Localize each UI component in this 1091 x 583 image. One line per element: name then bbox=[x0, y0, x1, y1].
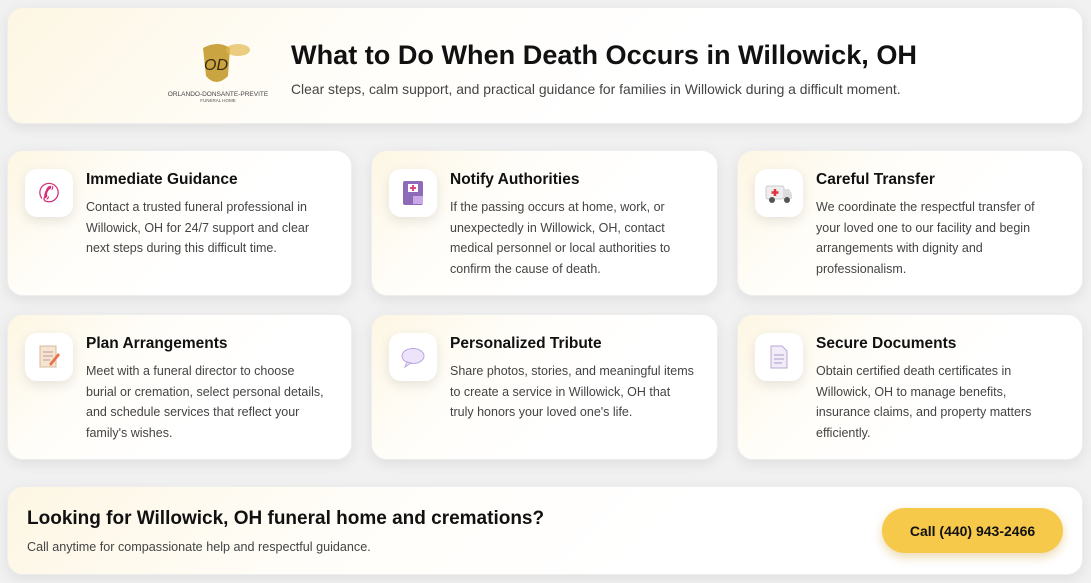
card: Notify Authorities bbox=[371, 150, 718, 296]
card: Plan Arrangements: Plan Arrangements bbox=[86, 335, 228, 352]
icon: memo bbox=[25, 333, 73, 381]
card: Immediate Guidance: Immediate Guidance bbox=[86, 171, 238, 188]
header panel bbox=[7, 7, 1083, 124]
card: Secure Documents bbox=[737, 314, 1083, 460]
icon: hospital bbox=[389, 169, 437, 217]
card: Careful Transfer: arrangements with dignity and bbox=[816, 241, 983, 255]
card: Personalized Tribute: Personalized Tribute bbox=[450, 335, 602, 352]
CTA heading: Looking for Willowick, OH funeral home and cremations? bbox=[27, 508, 544, 529]
logo bbox=[168, 44, 268, 102]
card: Plan Arrangements: burial or cremation, select personal details, bbox=[86, 384, 324, 398]
card: Plan Arrangements bbox=[7, 314, 352, 460]
CTA bar bbox=[7, 486, 1083, 575]
card: Personalized Tribute: to create a service in Willowick, OH that bbox=[450, 384, 670, 398]
card: Plan Arrangements: family's wishes. bbox=[86, 426, 172, 440]
card: Careful Transfer bbox=[737, 150, 1083, 296]
icon: document bbox=[755, 333, 803, 381]
card: Immediate Guidance bbox=[7, 150, 352, 296]
card: Careful Transfer: professionalism. bbox=[816, 262, 906, 276]
icon: phone: ✆ bbox=[38, 178, 60, 208]
card: Personalized Tribute: truly honors your loved one's life. bbox=[450, 405, 632, 419]
card: Immediate Guidance: Willowick, OH for 24/7 support and clear bbox=[86, 220, 309, 234]
card: Secure Documents: Secure Documents bbox=[816, 335, 956, 352]
card: Secure Documents: efficiently. bbox=[816, 426, 870, 440]
card: Careful Transfer: Careful Transfer bbox=[816, 171, 935, 188]
logo: OD bbox=[204, 57, 228, 74]
card: Secure Documents: insurance claims, and property matters bbox=[816, 405, 1031, 419]
card: Immediate Guidance: next steps during this difficult time. bbox=[86, 241, 277, 255]
call button: Call (440) 943-2466 bbox=[910, 522, 1035, 538]
card: Notify Authorities: Notify Authorities bbox=[450, 171, 579, 188]
card: Notify Authorities: confirm the cause of death. bbox=[450, 262, 601, 276]
card: Notify Authorities: unexpectedly in Willowick, OH, contact bbox=[450, 220, 665, 234]
CTA text: Call anytime for compassionate help and respectful guidance. bbox=[27, 540, 371, 554]
card: Notify Authorities: medical personnel or local authorities to bbox=[450, 241, 670, 255]
card: Secure Documents: Obtain certified death certificates in bbox=[816, 364, 1011, 378]
card: Plan Arrangements: Meet with a funeral director to choose bbox=[86, 364, 294, 378]
card: Immediate Guidance: Contact a trusted funeral professional in bbox=[86, 200, 307, 214]
card: Careful Transfer: We coordinate the respectful transfer of bbox=[816, 200, 1035, 214]
icon: phone bbox=[25, 169, 73, 217]
card: Secure Documents: Willowick, OH to manage benefits, bbox=[816, 384, 1006, 398]
card: Careful Transfer: your loved one to our facility and begin bbox=[816, 220, 1030, 234]
logo: ORLANDO-DONSANTE-PREVITE bbox=[168, 91, 268, 98]
icon: speech bubble bbox=[389, 333, 437, 381]
card: Notify Authorities: If the passing occurs at home, work, or bbox=[450, 200, 665, 214]
subtitle: Clear steps, calm support, and practical guidance for families in Willowick during a difficult moment. bbox=[291, 81, 901, 97]
card: Personalized Tribute bbox=[371, 314, 718, 460]
icon: ambulance bbox=[755, 169, 803, 217]
card: Plan Arrangements: and schedule services that reflect your bbox=[86, 405, 299, 419]
title: What to Do When Death Occurs in Willowick, OH bbox=[291, 39, 917, 70]
call button bbox=[882, 508, 1063, 553]
card: Personalized Tribute: Share photos, stories, and meaningful items bbox=[450, 364, 694, 378]
